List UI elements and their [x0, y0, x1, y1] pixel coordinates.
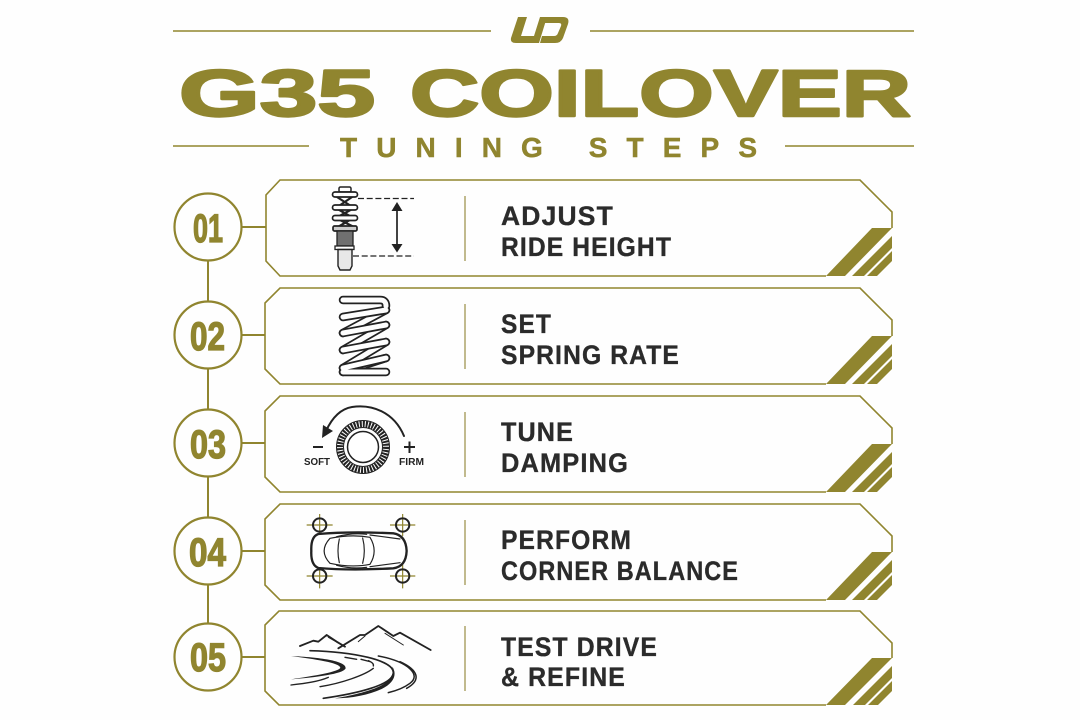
- step 1: [174, 180, 892, 276]
- icon: damping dial soft to firm: SOFT: [304, 457, 330, 468]
- step 2 label: [501, 309, 680, 370]
- panel: step 5: [265, 611, 892, 705]
- subtitle: TUNING STEPS: [340, 132, 757, 163]
- step 2 number badge: [174, 302, 242, 368]
- stripes: [826, 552, 892, 600]
- step 5: [174, 611, 892, 705]
- divider: [464, 196, 466, 261]
- stripes: [826, 444, 892, 492]
- panel: step 4: [265, 504, 892, 600]
- step 2 connector: [242, 334, 266, 336]
- divider: [464, 304, 466, 369]
- connector line between step circles: [207, 227, 209, 657]
- step 3 label: DAMPING: [501, 448, 629, 478]
- step 1 number badge: 01: [193, 207, 223, 251]
- divider: [464, 626, 466, 691]
- stripes: [826, 336, 892, 384]
- step 2 label: SET: [501, 309, 552, 339]
- logo: UD mark: [511, 17, 568, 43]
- title: G35: [179, 56, 375, 130]
- step 3: [174, 396, 892, 492]
- stripes: [826, 658, 892, 705]
- step 5 label: & REFINE: [501, 662, 626, 692]
- title: [179, 56, 911, 130]
- panel: step 1: [266, 180, 892, 276]
- icon: coilover with ride height arrow: [332, 187, 414, 270]
- icon: damping dial soft to firm: FIRM: [399, 457, 424, 468]
- step 4 connector: [242, 550, 265, 552]
- step 1 label: ADJUST: [501, 201, 614, 231]
- stripes: [826, 228, 892, 276]
- step 5 number badge: 05: [190, 636, 226, 680]
- step 4 label: [501, 525, 739, 586]
- title: COILOVER: [410, 56, 911, 130]
- panel: step 2: [265, 288, 892, 384]
- step 4 number badge: [174, 518, 242, 584]
- panel: step 3: [265, 396, 892, 492]
- step 1 label: RIDE HEIGHT: [501, 232, 672, 262]
- icon: coil spring: [343, 300, 386, 372]
- step 3 number badge: 03: [190, 423, 226, 467]
- step 4 label: PERFORM: [501, 525, 632, 555]
- step 3 number badge: [174, 410, 242, 476]
- step 5 number badge: [174, 624, 242, 690]
- step 5 label: [501, 632, 658, 692]
- step 1 label: [501, 201, 672, 262]
- step 2 number badge: 02: [190, 315, 225, 359]
- step 2: [174, 288, 892, 384]
- icon: car top view with corner weights: [307, 514, 415, 588]
- step 1 number badge: [174, 194, 242, 260]
- icon: damping dial soft to firm: [304, 406, 424, 474]
- step 3 connector: [242, 442, 265, 444]
- step 3 label: [501, 417, 629, 478]
- step 5 connector: [242, 656, 265, 658]
- step 5 label: TEST DRIVE: [501, 632, 658, 662]
- step 4: [174, 504, 892, 600]
- icon: mountain road: [291, 626, 431, 698]
- divider: [464, 412, 466, 477]
- divider: [464, 520, 466, 585]
- step 4 number badge: 04: [189, 531, 227, 575]
- step 3 label: TUNE: [501, 417, 574, 447]
- step 1 connector: [242, 226, 266, 228]
- step 4 label: CORNER BALANCE: [501, 556, 739, 586]
- step 2 label: SPRING RATE: [501, 340, 680, 370]
